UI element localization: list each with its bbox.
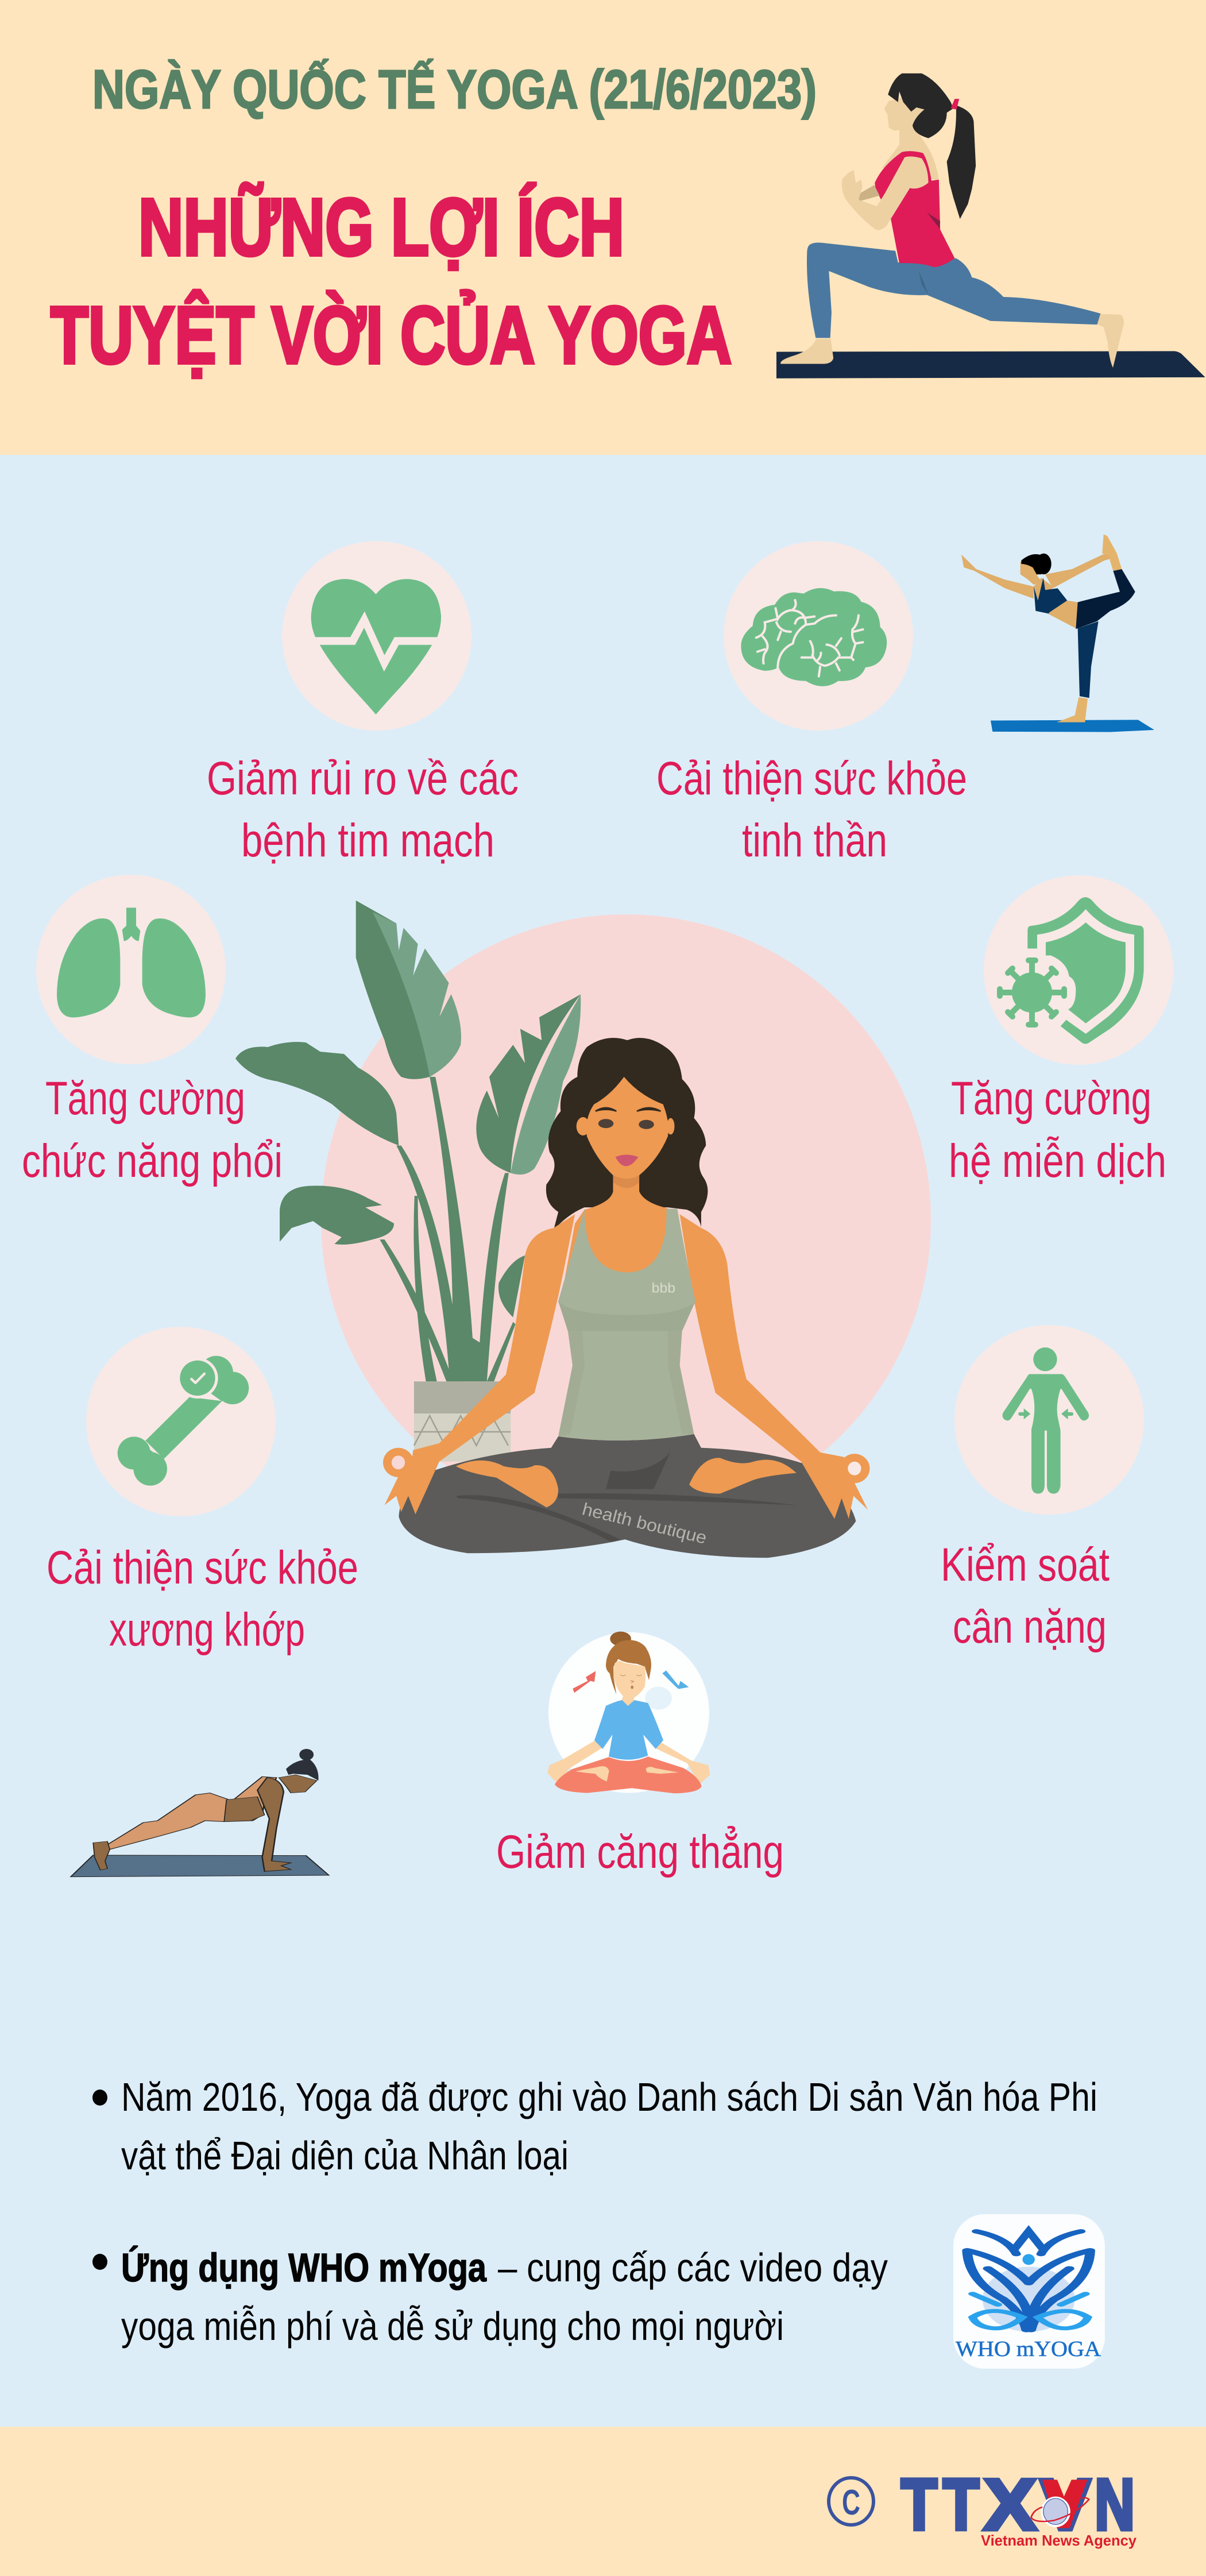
- illustration: plank pose: [71, 1749, 329, 1877]
- title line 2: TUYỆT VỜI CỦA YOGA: [51, 289, 732, 380]
- label: bone: Cải thiện sức khỏe: [47, 1542, 358, 1594]
- label: weight: Kiểm soát: [941, 1539, 1110, 1591]
- plant: [235, 901, 581, 1462]
- logo on tank top: bbb: [652, 1281, 675, 1296]
- copyright mark: [829, 2478, 873, 2525]
- icon: shield and virus: [984, 875, 1173, 1065]
- label: heart: bệnh tim mạch: [241, 814, 494, 867]
- label: weight: cân nặng: [953, 1601, 1107, 1653]
- bullet 1: [92, 2075, 1097, 2178]
- label: lungs: chức năng phổi: [22, 1135, 283, 1187]
- label: lungs: Tăng cường: [45, 1072, 245, 1125]
- bullet 2: Ứng dụng WHO mYoga: [121, 2245, 487, 2290]
- text on leggings: health boutique: [580, 1499, 709, 1548]
- chest and neck: [563, 1173, 691, 1288]
- logo: TTXVN: X: [984, 2464, 1037, 2545]
- illustration: dancer pose: [961, 534, 1154, 732]
- label: immune: Tăng cường: [951, 1072, 1151, 1125]
- logo: TTXVN: N: [1095, 2464, 1135, 2545]
- bullet 1: vật thể Đại diện của Nhân loại: [121, 2133, 569, 2178]
- illustration: woman in lunge pose: [776, 74, 1205, 379]
- label: brain: [656, 752, 967, 867]
- label: heart: Giảm rủi ro về các: [207, 752, 519, 805]
- logo: WHO mYoga: WHO mYOGA: [956, 2337, 1101, 2361]
- label: heart: [207, 752, 519, 867]
- label: brain: tinh thần: [742, 814, 887, 867]
- logo: TTXVN: Vietnam News Agency: [981, 2532, 1137, 2549]
- header band: [0, 0, 1206, 455]
- footer band: [0, 2427, 1206, 2576]
- icon: lungs: [36, 875, 226, 1064]
- subtitle: NGÀY QUỐC TẾ YOGA (21/6/2023): [92, 59, 817, 120]
- logo: WHO mYoga: [953, 2214, 1105, 2369]
- label: brain: Cải thiện sức khỏe: [656, 752, 967, 805]
- label: weight: [941, 1539, 1110, 1653]
- label: immune: [949, 1072, 1166, 1187]
- icon: brain: [724, 541, 913, 731]
- label: bone: xương khớp: [109, 1604, 305, 1656]
- illustration: big pink circle: [321, 914, 931, 1524]
- bullet 2: – cung cấp các video dạy: [498, 2245, 888, 2290]
- icon: bone: [86, 1327, 276, 1516]
- logo: TTXVN: T: [943, 2464, 979, 2545]
- logo: TTXVN: V: [1040, 2464, 1091, 2545]
- label: stress: Giảm căng thẳng: [496, 1826, 784, 1878]
- bullet 2: [92, 2245, 888, 2349]
- illustration: plant and meditating woman: [235, 901, 869, 1558]
- icon: heart rate: [282, 541, 471, 731]
- label: lungs: [22, 1072, 283, 1187]
- illustration: calm meditation figure: [547, 1632, 710, 1793]
- title line 1: NHỮNG LỢI ÍCH: [138, 181, 624, 272]
- icon: body weight: [954, 1325, 1144, 1515]
- woman: [383, 1038, 869, 1558]
- logo: TTXVN: T: [901, 2464, 937, 2545]
- logo: TTXVN: [901, 2464, 1137, 2549]
- copyright mark: C: [842, 2483, 860, 2523]
- bullet 2: yoga miễn phí và dễ sử dụng cho mọi người: [121, 2304, 784, 2349]
- label: bone: [47, 1542, 358, 1656]
